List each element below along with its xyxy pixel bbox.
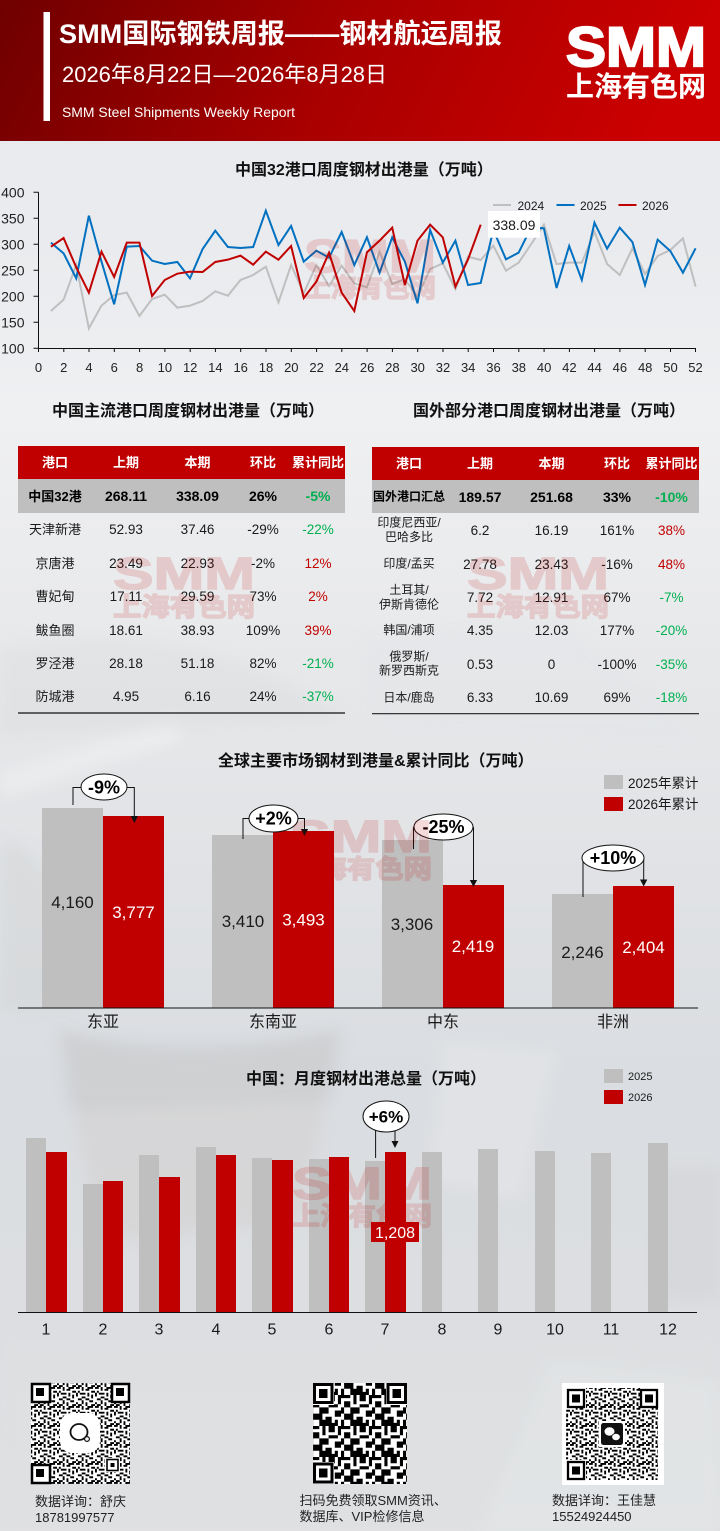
row: Russia: 新罗西斯克	[379, 662, 439, 678]
category labels: 非洲	[597, 1013, 629, 1031]
row: India: 23.43	[535, 557, 568, 572]
chart axes	[34, 192, 696, 352]
month labels: 5	[268, 1322, 277, 1338]
chart legend	[493, 199, 669, 213]
month labels: 1	[42, 1322, 51, 1338]
header banner	[0, 0, 720, 141]
caption: Shu Qing: 18781997577	[35, 1510, 115, 1525]
row: Caofeidian: 17.11	[110, 589, 142, 604]
row: India: 27.78	[463, 557, 497, 572]
caption: Shu Qing: 数据详询：舒庆	[35, 1494, 126, 1509]
row: Luojing: -21%	[302, 656, 334, 671]
icon: chat bubble	[60, 1413, 100, 1453]
row: Japan: 10.69	[535, 690, 568, 705]
x axis labels: 18	[259, 360, 273, 375]
x axis labels: 48	[638, 360, 652, 375]
x axis labels: 38	[512, 360, 526, 375]
row: Caofeidian: 曹妃甸	[35, 589, 75, 604]
row: Bayuquan	[35, 623, 332, 638]
bars: Southeast Asia: 3,410	[222, 912, 264, 931]
chart legend: 2024	[518, 199, 545, 213]
row: Turkey: 67%	[603, 590, 631, 605]
y axis labels	[1, 184, 25, 356]
row: Tianjin: 37.46	[181, 522, 214, 537]
panel: contact footer	[31, 1383, 664, 1525]
y axis labels: 400	[1, 184, 25, 200]
x axis labels: 12	[183, 360, 197, 375]
watermark: arrivals chart	[290, 811, 432, 884]
y axis labels: 200	[1, 288, 25, 304]
caption: free subscription: 扫码免费领取SMM资讯、	[300, 1493, 447, 1508]
month labels: 9	[494, 1322, 503, 1338]
x axis labels: 46	[613, 360, 627, 375]
2026 monthly bars	[46, 1152, 406, 1312]
bars: Africa	[552, 886, 674, 1008]
x axis labels: 36	[486, 360, 501, 375]
bars: Middle East: 3,306	[391, 915, 433, 934]
row: Russia	[379, 650, 687, 678]
callout: +10%: +10%	[590, 848, 636, 868]
x axis labels: 20	[284, 360, 299, 375]
row: Indonesia: 16.19	[535, 523, 568, 538]
row: Russia: 0.53	[467, 657, 493, 672]
x axis labels: 28	[385, 360, 400, 375]
row: Jingtang: 23.49	[109, 556, 143, 571]
x axis labels: 24	[335, 360, 349, 375]
month labels	[42, 1322, 677, 1338]
summary row: 338.09	[176, 488, 219, 504]
bars: Southeast Asia	[212, 831, 334, 1008]
watermark: left table: 上海有色网	[113, 592, 255, 622]
row: Tianjin: -29%	[247, 522, 279, 537]
y axis labels: 100	[1, 340, 25, 356]
callout: +6%: +6%	[369, 1108, 403, 1126]
y axis labels: 300	[1, 236, 25, 252]
callout: -9%	[73, 774, 138, 823]
y axis labels: 350	[1, 210, 25, 226]
QR code: SMM free subscription	[313, 1383, 407, 1484]
summary row: 中国32港	[28, 489, 82, 504]
row: Korea: 12.03	[535, 623, 568, 638]
logo: SMM	[566, 15, 706, 78]
bars: Africa: 2,246	[561, 943, 604, 962]
table header: 本期	[538, 456, 565, 471]
row: Bayuquan: 38.93	[181, 623, 214, 638]
x axis labels: 40	[537, 360, 551, 375]
row: Caofeidian: 73%	[249, 589, 277, 604]
row: India: 印度/孟买	[383, 556, 435, 570]
callout: +2%	[243, 805, 308, 839]
x axis labels: 8	[136, 360, 143, 375]
watermark: right table: SMM	[467, 548, 609, 599]
row: Turkey: -7%	[659, 590, 684, 605]
x axis labels: 34	[461, 360, 475, 375]
chart title: 中国：月度钢材出港总量（万吨）	[246, 1069, 486, 1088]
table header: 累计同比	[292, 455, 344, 470]
row: Indonesia	[377, 514, 685, 544]
row: Russia: 0	[548, 657, 555, 672]
value label 338.09: 338.09	[493, 217, 536, 233]
month labels: 10	[546, 1322, 564, 1338]
row: Turkey: 土耳其/	[389, 583, 429, 597]
watermark: right table: 上海有色网	[467, 592, 609, 622]
table title: 中国主流港口周度钢材出港量（万吨）	[52, 401, 324, 420]
row: Fangcheng: 24%	[249, 689, 277, 704]
chart title: 全球主要市场钢材到港量&累计同比（万吨）	[218, 751, 534, 770]
row: India: -16%	[601, 557, 633, 572]
chart legend: 2025年累计	[628, 776, 699, 791]
logo	[566, 15, 706, 102]
panel: China ports table	[18, 401, 345, 713]
chart legend	[604, 1069, 652, 1104]
watermarks	[113, 230, 609, 1231]
x axis labels: 14	[208, 360, 223, 375]
row: Jingtang: 12%	[304, 556, 332, 571]
row: Fangcheng: 防城港	[35, 689, 75, 704]
bars: East Asia	[42, 808, 164, 1008]
row: Indonesia: 印度尼西亚/	[377, 514, 441, 530]
chart legend: 2026	[642, 199, 669, 213]
month labels: 6	[325, 1322, 334, 1338]
bars: East Asia: 3,777	[112, 903, 155, 922]
x axis labels: 52	[688, 360, 703, 375]
x axis labels: 50	[663, 360, 678, 375]
watermark: monthly chart: 上海有色网	[292, 1201, 432, 1231]
x axis labels: 30	[410, 360, 425, 375]
table header: 上期	[113, 455, 139, 470]
month labels: 4	[212, 1322, 221, 1338]
y axis labels: 250	[1, 262, 25, 278]
row: Luojing: 82%	[249, 656, 277, 671]
month labels: 7	[381, 1322, 390, 1338]
panel: weekly line chart	[1, 160, 703, 375]
bars: Middle East: 2,419	[452, 937, 494, 956]
y axis labels: 150	[1, 314, 25, 330]
series 2025	[51, 211, 696, 304]
table header: 累计同比	[645, 456, 698, 471]
month labels: 12	[659, 1322, 677, 1338]
table header	[372, 447, 699, 480]
row: Korea: 韩国/浦项	[383, 622, 435, 637]
callout: -25%	[414, 814, 477, 887]
watermark: line chart: 上海有色网	[304, 273, 436, 303]
x axis labels: 4	[85, 360, 93, 375]
row: Turkey: 12.91	[535, 590, 568, 605]
row: Caofeidian	[35, 589, 328, 604]
english subtitle: SMM Steel Shipments Weekly Report	[62, 104, 295, 120]
panel: China monthly bar chart	[18, 1069, 697, 1338]
summary row: 国外港口汇总	[373, 488, 445, 504]
row: Russia: -35%	[656, 657, 687, 672]
row: Turkey: 伊斯肯德伦	[379, 596, 439, 612]
watermark: left table: SMM	[113, 548, 255, 599]
chart legend	[604, 775, 699, 812]
table header: 上期	[467, 456, 493, 471]
row: Korea: 177%	[600, 623, 634, 638]
row: Bayuquan: 109%	[246, 623, 280, 638]
row: Indonesia: 6.2	[471, 523, 489, 538]
caption: Wang Jiahui	[552, 1493, 656, 1524]
row: Japan: 69%	[603, 690, 631, 705]
series 2024	[51, 225, 696, 328]
series lines	[51, 211, 696, 328]
row: Indonesia: 161%	[600, 523, 634, 538]
row: Turkey	[379, 583, 684, 612]
x axis labels: 22	[309, 360, 324, 375]
callout: +6%	[363, 1101, 409, 1158]
table title: 国外部分港口周度钢材出港量（万吨）	[413, 401, 685, 420]
x axis labels: 2	[60, 360, 67, 375]
summary row: -10%	[655, 489, 688, 505]
row: Japan	[383, 690, 687, 705]
row: Tianjin: 52.93	[109, 522, 143, 537]
panel: overseas ports table	[372, 401, 699, 714]
row: Jingtang: 京唐港	[35, 556, 75, 571]
category labels: 东南亚	[249, 1013, 297, 1031]
summary row: 268.11	[105, 488, 147, 504]
table header: 本期	[184, 455, 211, 470]
month labels: 2	[99, 1322, 108, 1338]
callout: +10%	[582, 845, 647, 897]
x axis labels: 42	[562, 360, 577, 375]
x axis labels: 0	[35, 360, 42, 375]
row: Russia: 俄罗斯/	[389, 650, 429, 664]
category labels: 中东	[427, 1013, 459, 1031]
row: Japan: -18%	[656, 690, 687, 705]
callout: -25%: -25%	[422, 817, 465, 837]
2025 monthly bars	[26, 1138, 668, 1312]
row: Fangcheng: 4.95	[113, 689, 139, 704]
x axis labels: 32	[436, 360, 450, 375]
header accent bar	[44, 12, 50, 121]
callout: -9%: -9%	[88, 778, 120, 798]
x axis labels: 10	[158, 360, 172, 375]
row: Luojing: 51.18	[181, 656, 214, 671]
month labels: 11	[603, 1322, 619, 1338]
main title: SMM国际钢铁周报——钢材航运周报	[59, 19, 502, 49]
month labels: 8	[438, 1322, 447, 1338]
row: Korea: 4.35	[467, 623, 493, 638]
row: Caofeidian: 29.59	[181, 589, 214, 604]
row: Bayuquan: 鲅鱼圈	[35, 623, 75, 638]
QR code: Shu Qing	[31, 1383, 130, 1484]
x axis labels: 44	[587, 360, 602, 375]
caption: Wang Jiahui: 15524924450	[552, 1509, 632, 1524]
summary row: 26%	[249, 488, 278, 504]
line chart title: 中国32港口周度钢材出港量（万吨）	[235, 160, 493, 179]
caption: free subscription: 数据库、VIP检修信息	[300, 1509, 424, 1524]
x axis labels: 16	[233, 360, 248, 375]
summary row: 33%	[603, 489, 632, 505]
summary row	[372, 480, 699, 513]
category labels	[87, 1013, 629, 1031]
row: Tianjin	[29, 522, 334, 537]
bars: East Asia: 4,160	[51, 893, 94, 912]
row: Jingtang: -2%	[251, 556, 275, 571]
watermark: monthly chart	[292, 1158, 432, 1231]
chart legend: 2026年累计	[628, 797, 699, 812]
watermark: right table	[467, 548, 609, 622]
row: Jingtang: 22.93	[181, 556, 214, 571]
callout: +2%: +2%	[255, 808, 292, 828]
table header: 环比	[250, 455, 276, 470]
row: Japan: 日本/鹿岛	[383, 690, 435, 704]
row: Japan: 6.33	[467, 690, 493, 705]
chart legend: 2025	[628, 1071, 652, 1083]
caption: Shu Qing	[35, 1494, 126, 1525]
x axis labels	[35, 360, 703, 375]
x axis labels: 26	[360, 360, 374, 375]
chart legend: 2025	[580, 199, 607, 213]
row: Russia: -100%	[597, 657, 637, 672]
row: Luojing	[35, 656, 334, 671]
row: Fangcheng: -37%	[302, 689, 334, 704]
category labels: 东亚	[87, 1013, 119, 1031]
bars: Southeast Asia: 3,493	[282, 910, 325, 930]
date range: 2026年8月22日—2026年8月28日	[62, 62, 387, 87]
bars: Middle East	[382, 840, 504, 1008]
row: Caofeidian: 2%	[308, 589, 328, 604]
summary row: 189.57	[459, 489, 502, 505]
row: Fangcheng: 6.16	[184, 689, 211, 704]
watermark: line chart	[304, 230, 436, 303]
row: Indonesia: 38%	[658, 523, 685, 538]
caption: Wang Jiahui: 数据详询：王佳慧	[552, 1493, 656, 1508]
icon: wechat	[599, 1421, 625, 1447]
QR code: Wang Jiahui	[562, 1383, 664, 1485]
row: Jingtang	[35, 556, 332, 571]
summary row: -5%	[306, 488, 331, 504]
row: Indonesia: 巴哈多比	[385, 530, 433, 544]
series 2026	[51, 225, 481, 311]
value label 1,208: 1,208	[375, 1225, 415, 1242]
row: Bayuquan: 18.61	[109, 623, 143, 638]
row: Turkey: 7.72	[467, 590, 493, 605]
row: India	[383, 556, 685, 572]
watermark: left table	[113, 548, 255, 622]
row: Korea: -20%	[656, 623, 687, 638]
month labels: 3	[155, 1322, 164, 1338]
caption: free subscription	[300, 1493, 447, 1524]
table header: 港口	[396, 456, 422, 471]
chart legend: 2026	[628, 1092, 652, 1104]
row: Tianjin: -22%	[302, 522, 334, 537]
watermark: monthly chart: SMM	[292, 1158, 432, 1209]
watermark: arrivals chart: SMM	[290, 811, 432, 862]
row: Tianjin: 天津新港	[29, 522, 81, 537]
row: Luojing: 28.18	[109, 656, 143, 671]
bars: Africa: 2,404	[622, 938, 665, 957]
row: Fangcheng	[35, 689, 334, 704]
row: India: 48%	[658, 557, 685, 572]
row: Luojing: 罗泾港	[35, 656, 75, 671]
table header: 环比	[604, 456, 630, 471]
table header: 港口	[42, 455, 68, 470]
summary row	[18, 479, 345, 513]
row: Bayuquan: 39%	[304, 623, 332, 638]
row: Korea	[383, 622, 687, 638]
x axis labels: 6	[111, 360, 118, 375]
panel: global arrivals bar chart	[18, 751, 699, 1031]
value label 338.09	[488, 211, 540, 238]
summary row: 251.68	[530, 489, 573, 505]
watermark: line chart: SMM	[304, 230, 436, 282]
watermark: arrivals chart: 上海有色网	[290, 854, 432, 884]
logo: 上海有色网	[566, 71, 706, 102]
table header	[18, 446, 345, 479]
